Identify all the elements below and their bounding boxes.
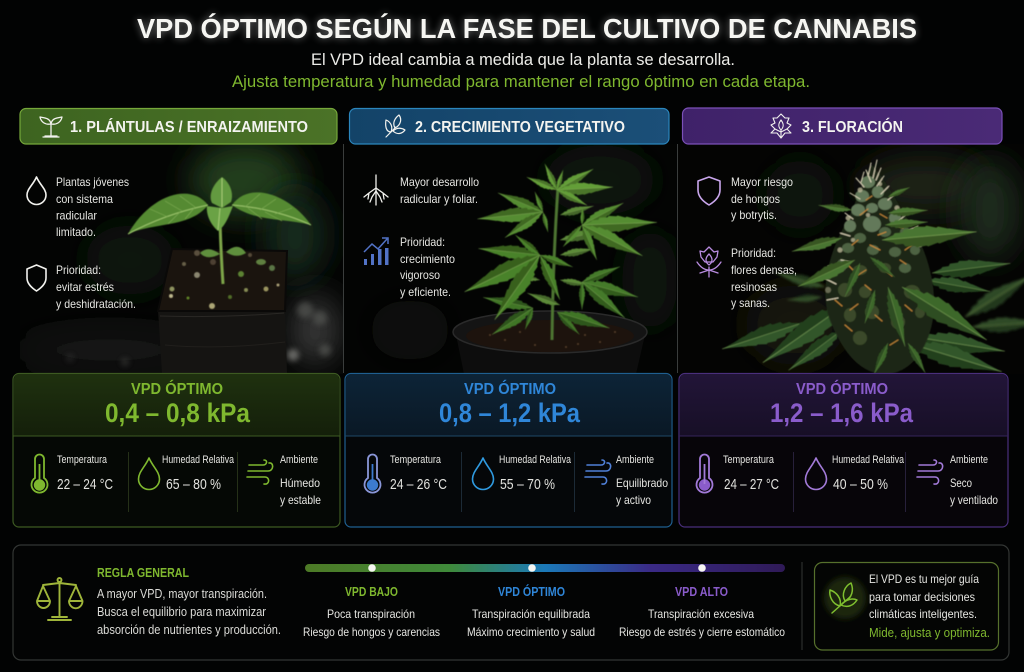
panel: floración [678,108,1024,382]
icon: shield [27,265,46,291]
scale label: VPD óptimo [467,584,595,639]
card: VPD floración: 40 – 50 % [833,476,888,493]
text: prioridad: evitar estrés [56,280,114,294]
text: regla general: A mayor VPD, mayor transpiración. [97,586,267,601]
card: VPD plántulas: y estable [280,493,321,507]
text: prioridad [400,235,455,299]
header: plántulas: 1. PLÁNTULAS / ENRAIZAMIENTO [70,119,308,136]
card: VPD vegetativo: Temperatura [390,454,442,466]
photo: young plant in pot [372,145,676,372]
card: VPD floración: Ambiente [950,454,988,466]
icon: drop [472,458,494,490]
plant [460,162,657,340]
callout: Mide, ajusta y optimiza. [869,625,990,640]
text: plantas jóvenes: con sistema [56,192,113,206]
icon: leaves [386,115,405,137]
bud [824,160,934,374]
scale label: VPD bajo: VPD BAJO [345,585,398,599]
card: VPD vegetativo: Humedad Relativa [499,454,572,466]
soil block [158,249,287,374]
icon: wind [917,460,943,484]
scale label: VPD óptimo: Transpiración equilibrada [472,607,590,621]
header: floración: 3. FLORACIÓN [802,118,903,136]
text: mayor riesgo [731,175,793,222]
text: prioridad: flores densas, [731,263,797,277]
card: VPD floración: y ventilado [950,493,998,507]
text: plantas jóvenes: radicular [56,208,97,222]
card: VPD floración: Temperatura [723,454,775,466]
icon: drop [27,177,46,204]
card: VPD vegetativo: 55 – 70 % [500,476,555,493]
icon: flower [697,247,721,277]
text: prioridad: Prioridad: [731,246,776,260]
scale label: VPD bajo [303,585,440,639]
card: VPD vegetativo: Ambiente [616,454,654,466]
icon: leaves [830,583,857,613]
background leaves [773,267,1024,335]
card: VPD plántulas: VPD ÓPTIMO [131,379,223,398]
icon: flower [771,114,791,138]
text: regla general: Busca el equilibrio para maximizar [97,604,267,619]
text: mayor desarrollo: radicular y foliar. [400,192,478,206]
pot [453,311,647,374]
top leaves [790,185,978,293]
VPD scale bar [305,564,785,572]
card: VPD plántulas: 22 – 24 °C [57,476,113,493]
text: prioridad: resinosas [731,280,777,294]
callout: climáticas inteligentes. [869,607,977,621]
panel: plántulas [15,108,343,374]
card: VPD floración: Seco [950,476,972,490]
photo: seedling in soil block [15,142,343,374]
header: floración [682,108,1002,144]
callout [814,562,998,650]
icon: wind [247,460,273,484]
icon: roots [364,175,388,205]
icon: drop [138,458,160,490]
card: VPD plántulas: Humedad Relativa [162,454,235,466]
header: crecimiento vegetativo: 2. CRECIMIENTO VEGETATIVO [415,119,625,136]
text: mayor riesgo: de hongos [731,192,780,206]
callout: El VPD es tu mejor guía [869,572,979,586]
text: prioridad [731,246,797,310]
photo: flowering bud [722,145,1024,373]
text: plantas jóvenes: limitado. [56,225,96,239]
card: VPD plántulas: Ambiente [280,454,318,466]
card: VPD floración: 24 – 27 °C [724,476,779,493]
text: mayor riesgo: y botrytis. [731,208,777,222]
callout: para tomar decisiones [869,590,975,604]
text: prioridad: y sanas. [731,296,770,310]
scale label: VPD bajo: Poca transpiración [327,607,415,621]
card: VPD vegetativo: 24 – 26 °C [390,476,447,493]
fan leaves [722,259,1011,372]
icon: growth chart [364,238,388,265]
card: VPD vegetativo: 0,8 – 1,2 kPa [439,398,581,428]
text: prioridad: vigoroso [400,268,440,282]
icon: wind [585,460,611,484]
subtitle: Ajusta temperatura y humedad para mantener el rango óptimo en cada etapa. [232,72,810,91]
text: mayor riesgo: Mayor riesgo [731,175,793,189]
icon: thermometer [31,454,48,493]
scale label: VPD óptimo: Máximo crecimiento y salud [467,625,595,639]
text: regla general [97,565,281,637]
scale label: VPD alto: VPD ALTO [675,585,728,599]
scale label: VPD bajo: Riesgo de hongos y carencias [303,625,440,639]
card: VPD vegetativo [345,374,672,527]
panel: regla general [13,545,1009,660]
seedling [128,177,311,284]
scale label: VPD óptimo: VPD ÓPTIMO [498,584,565,599]
card: VPD plántulas: 0,4 – 0,8 kPa [105,398,251,428]
scale label: VPD alto [619,585,785,639]
text: plantas jóvenes: Plantas jóvenes [56,175,129,189]
text: prioridad: crecimiento [400,252,455,266]
icon: drop [806,458,826,490]
text: prioridad: Prioridad: [400,235,445,249]
card: VPD floración [679,374,1008,527]
icon: balance scale [37,578,82,620]
panel: crecimiento vegetativo [344,108,678,374]
icon: sprout [40,117,62,137]
card: VPD vegetativo: Equilibrado [616,476,668,490]
card: VPD floración: 1,2 – 1,6 kPa [770,398,914,428]
title: VPD ÓPTIMO SEGÚN LA FASE DEL CULTIVO DE CANNABIS [137,13,917,44]
icon: thermometer [364,454,380,493]
card: VPD vegetativo: y activo [616,493,651,507]
text: prioridad: Prioridad: [56,263,101,277]
card: VPD plántulas: Temperatura [57,454,108,466]
text: prioridad [56,263,136,311]
text: prioridad: y eficiente. [400,285,451,299]
subtitle: El VPD ideal cambia a medida que la planta se desarrolla. [311,50,735,69]
scale label: VPD alto: Transpiración excesiva [648,607,754,621]
text: prioridad: y deshidratación. [56,297,136,311]
card: VPD plántulas: Húmedo [280,476,320,490]
scale label: VPD alto: Riesgo de estrés y cierre estomático [619,625,785,639]
card: VPD floración: Humedad Relativa [832,454,905,466]
card: VPD plántulas: 65 – 80 % [166,476,221,493]
header: plántulas [20,108,337,144]
icon: shield [698,177,720,205]
card: VPD plántulas [13,374,340,527]
text: regla general: REGLA GENERAL [97,565,189,580]
icon: thermometer [696,454,712,493]
card: VPD floración: VPD ÓPTIMO [796,379,888,398]
card: VPD vegetativo: VPD ÓPTIMO [464,379,556,398]
text: mayor desarrollo [400,175,479,206]
subtitle [232,50,810,91]
header: crecimiento vegetativo [350,108,669,144]
text: regla general: absorción de nutrientes y producción. [97,622,281,637]
text: mayor desarrollo: Mayor desarrollo [400,175,479,189]
text: plantas jóvenes [56,175,129,239]
